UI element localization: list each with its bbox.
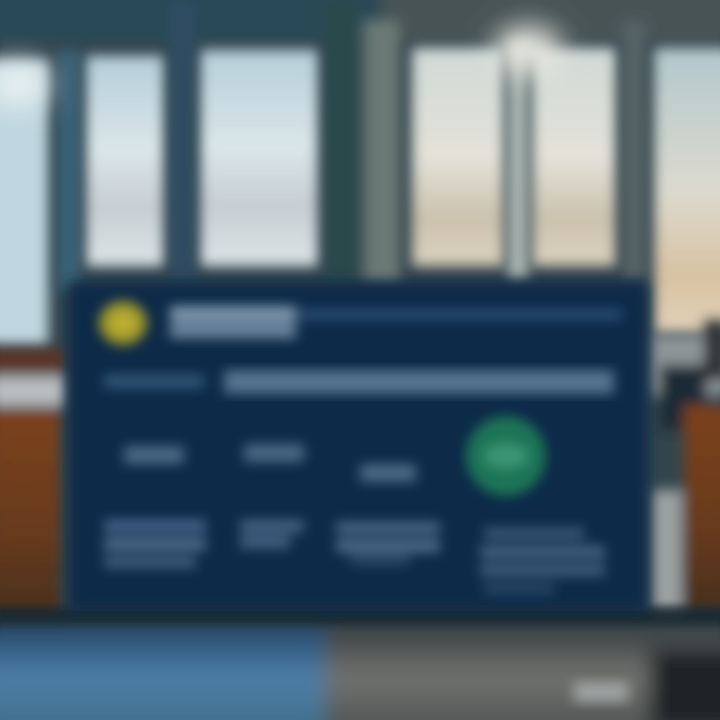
ceiling band bbox=[0, 0, 720, 42]
floor bbox=[0, 625, 720, 720]
ceiling lights bbox=[494, 26, 562, 74]
windows bbox=[0, 48, 720, 345]
heading bbox=[170, 306, 622, 338]
subheading bbox=[104, 370, 614, 394]
dark baseline under panel bbox=[0, 608, 720, 624]
left ledge and wood cabinet bbox=[0, 348, 65, 618]
floor highlight bbox=[574, 682, 628, 702]
icon: green circle bbox=[466, 416, 546, 496]
right side cabinet and figure bbox=[650, 320, 720, 610]
column text blocks bbox=[104, 520, 605, 593]
pillars bbox=[58, 0, 646, 290]
icon: yellow badge bbox=[99, 301, 147, 345]
panel: navy information card bbox=[68, 281, 648, 611]
column headings bbox=[124, 444, 416, 482]
